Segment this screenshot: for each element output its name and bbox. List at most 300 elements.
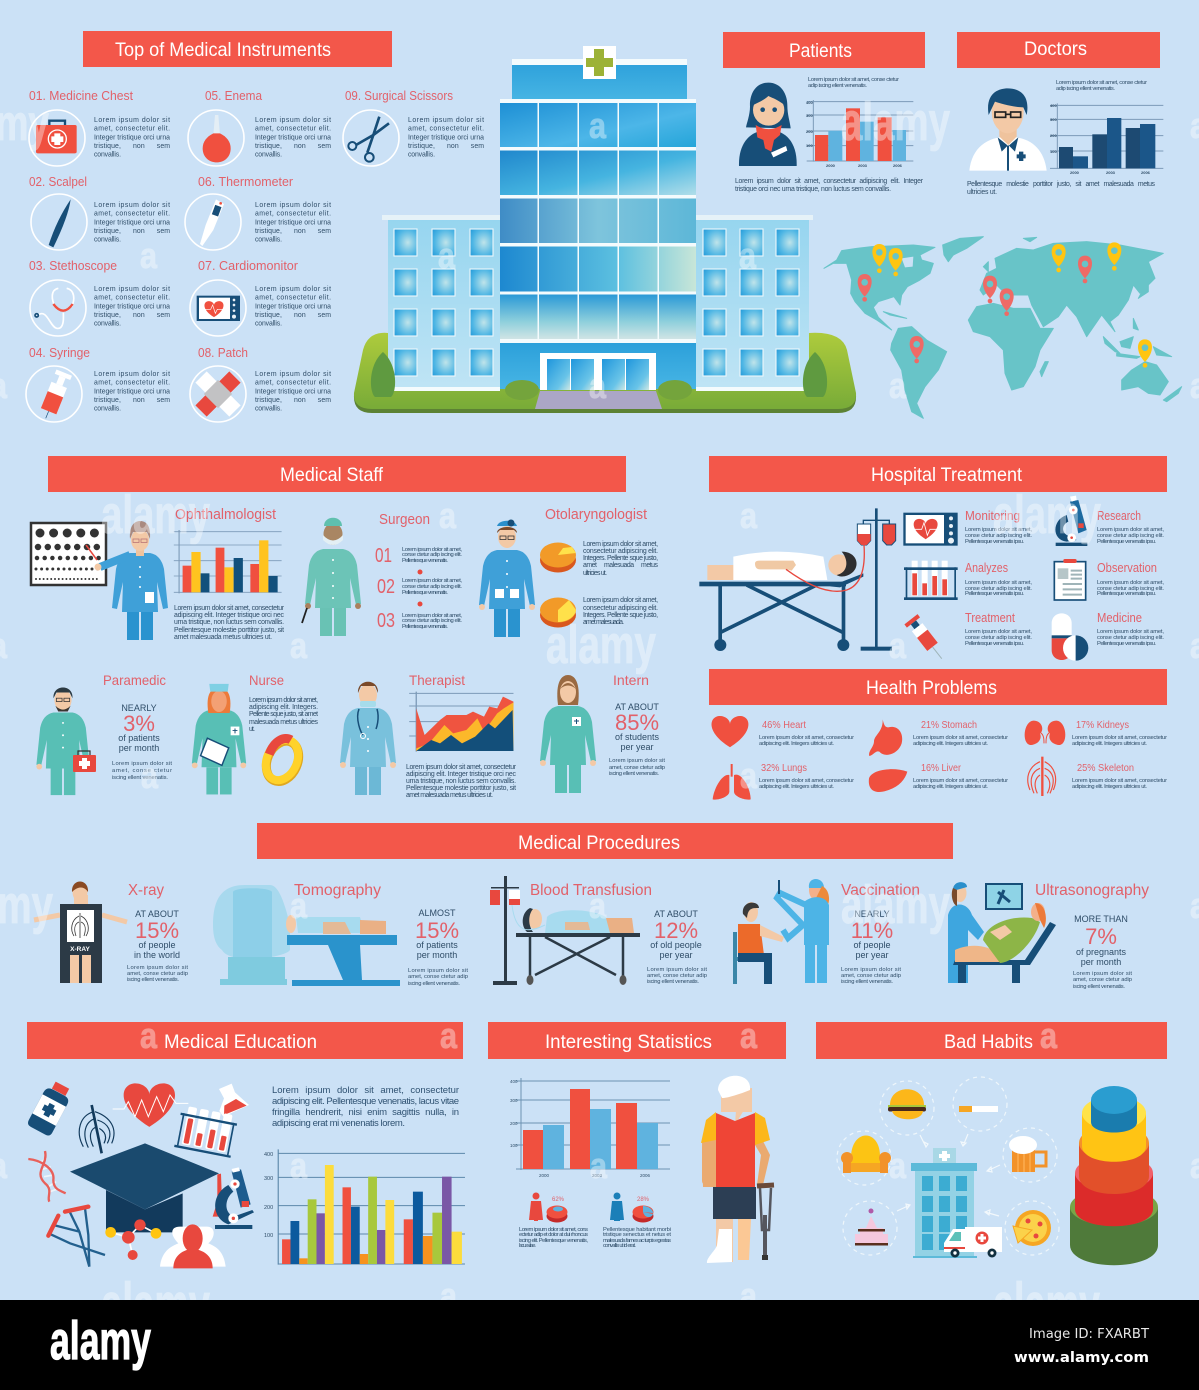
heading: medical staff	[48, 456, 626, 492]
icon: DNA helix	[28, 1151, 66, 1202]
stat: x-ray: in the world	[134, 950, 180, 960]
chart labels: patients: 2000	[826, 163, 836, 168]
watermarks: a	[740, 1015, 758, 1056]
stat: intern	[609, 702, 665, 777]
text block: nurse: malesuada metus ultricies	[249, 719, 319, 726]
chart: ophthalmologist bars	[174, 530, 282, 593]
illustration: tomography	[213, 885, 400, 986]
label: analyzes: Analyzes	[965, 560, 1008, 575]
stat: lungs: Lorem ipsum dolor sit amet, consectetur	[759, 778, 854, 784]
icon: people	[160, 1224, 226, 1268]
stat: blood transfusion: per year	[659, 950, 693, 960]
text block: instrument descriptions: amet, consectetur elit.	[255, 380, 331, 387]
label: monitoring: Monitoring	[965, 508, 1020, 523]
chart labels: doctors: 200	[1050, 133, 1057, 138]
watermarks: a	[889, 1145, 907, 1186]
stat: intern: of students	[615, 732, 660, 742]
text block: otolaryngologist 1: consectetur adipiscing elit.	[583, 548, 658, 555]
watermarks: a	[140, 235, 158, 276]
numbered list: surgeon: 03	[377, 610, 395, 632]
stat: 62%	[529, 1192, 568, 1222]
stat: paramedic: 3%	[123, 711, 155, 736]
text block: patients intro: Lorem ipsum dolor sit amet, conse ctetur	[808, 77, 899, 83]
chart labels: patients: 300	[806, 113, 813, 118]
chart: statistics bars: 2006	[640, 1173, 651, 1178]
chart: stacked cylinders	[1070, 1086, 1158, 1265]
stat: liver: Lorem ipsum dolor sit amet, consectetur	[913, 778, 1008, 784]
footer bar	[0, 1300, 1199, 1390]
text block: ophthalmologist: Lorem ipsum dolor sit amet, consectetur	[174, 605, 285, 612]
stat: 28%: 28%	[637, 1197, 650, 1203]
stat: ultrasonography: amet, conse ctetur adip	[1073, 977, 1132, 983]
stat: 28%	[610, 1192, 654, 1222]
text block: observation: conse ctetur adip iscing elit.	[1097, 586, 1164, 592]
icon: ambulance	[944, 1227, 1002, 1258]
stat: ultrasonography	[1073, 914, 1132, 990]
stat: skeleton: 25% Skeleton	[1077, 762, 1134, 774]
image id: Image ID: FXARBT	[1029, 1327, 1149, 1342]
watermarks: alamy	[993, 485, 1101, 545]
stat: heart: 46% Heart	[762, 719, 806, 731]
text block: instrument descriptions: convallis.	[255, 320, 282, 328]
stat: vaccination: NEARLY	[854, 909, 890, 919]
watermarks: a	[740, 495, 758, 536]
text block: instrument descriptions: Lorem ipsum dolor sit	[94, 117, 170, 124]
label: nurse: Nurse	[249, 672, 284, 688]
chart: statistics bars: 2000	[539, 1173, 550, 1178]
heading: medical staff: Medical Staff	[280, 465, 384, 486]
heading: instruments	[83, 31, 392, 67]
text block: instrument descriptions: convallis.	[94, 152, 121, 158]
text block: otolaryngologist 2	[583, 597, 658, 626]
stat: skeleton	[1072, 762, 1167, 790]
stat: tomography: 15%	[415, 918, 459, 943]
watermarks: a	[740, 1275, 758, 1316]
label: 07 Cardiomonitor: 07. Cardiomonitor	[198, 258, 299, 273]
text block: treatment: conse ctetur adip iscing elit.	[965, 635, 1032, 641]
hospital building	[354, 46, 856, 413]
text block: therapist: Lorem ipsum dolor sit amet, consectetur	[406, 764, 517, 771]
text block: treatment	[965, 629, 1032, 647]
panel: Health Problems	[709, 669, 1167, 800]
text block: instrument descriptions: Integer tristique orci urna	[255, 303, 331, 310]
text block: instrument descriptions: Lorem ipsum dolor sit	[94, 202, 170, 209]
text block: observation	[1097, 580, 1164, 597]
chart: therapist area	[409, 692, 513, 752]
stat: lungs	[759, 762, 854, 790]
text block: doctors intro: Lorem ipsum dolor sit amet, conse ctetur	[1056, 80, 1147, 86]
stat: tomography: of patients	[416, 940, 458, 950]
chart: education bars: 400	[264, 1152, 273, 1158]
chart labels: patients: 400	[806, 100, 813, 105]
figure: x-ray	[34, 882, 127, 983]
text block: instrument descriptions: tristique, non sem	[94, 228, 170, 235]
text block: instrument descriptions: convallis.	[255, 236, 282, 244]
watermarks: alamy	[101, 485, 210, 545]
text block: research: conse ctetur adip iscing elit.	[1097, 533, 1164, 539]
stat: stomach: adipiscing elit. Integers ultricies ut.	[913, 741, 988, 747]
numbered list: surgeon: Lorem ipsum dolor sit amet,	[402, 578, 462, 584]
label: blood transfusion: Blood Transfusion	[530, 882, 652, 899]
text block: instrument descriptions: Lorem ipsum dolor sit	[408, 117, 484, 124]
label: 02 Scalpel: 02. Scalpel	[29, 174, 87, 189]
heading: medical education: Medical Education	[164, 1032, 317, 1053]
figure: ophthalmologist	[94, 521, 168, 640]
icon: thermometer	[200, 199, 224, 246]
text block: instrument descriptions: convallis.	[94, 236, 121, 244]
stat: blood transfusion: Lorem ipsum dolor sit	[647, 967, 707, 973]
watermarks: a	[589, 365, 607, 406]
numbered list: surgeon: 02	[377, 576, 395, 598]
text block: instrument descriptions: Integer tristique orci urna	[255, 219, 331, 226]
text block: instrument descriptions: tristique, non sem	[94, 312, 170, 319]
stat: x-ray: Lorem ipsum dolor sit	[127, 965, 188, 971]
figure: surgeon	[302, 518, 361, 636]
watermarks: a	[1040, 1015, 1058, 1056]
stat: x-ray: 15%	[135, 918, 179, 943]
text block: instrument descriptions: amet, consectetur elit.	[408, 126, 484, 133]
text block: instrument descriptions: convallis.	[408, 152, 435, 158]
text block: patients body	[735, 178, 924, 193]
text block: research	[1097, 527, 1164, 545]
stat: paramedic: iscing ellent venenatis.	[112, 775, 168, 781]
stat: skeleton: adipiscing elit. Integers ultricies ut.	[1072, 784, 1147, 790]
text block: medicine: Pellentesque venenatis ipsu.	[1097, 641, 1156, 647]
text block: 62%	[519, 1227, 588, 1249]
stat: blood transfusion: iscing ellent venenatis.	[647, 979, 699, 985]
icon: doctor	[969, 88, 1047, 171]
watermarks: a	[590, 1145, 608, 1186]
sign: green cross	[583, 46, 616, 79]
text block: patients body: Lorem ipsum dolor sit amet, consectetur adipiscing elit. Integer	[735, 178, 924, 185]
text block: instrument descriptions: amet, consectetur elit.	[255, 211, 331, 218]
text block: otolaryngologist 2: Integers. Pellente sque justo,	[583, 612, 658, 619]
stat: lungs: adipiscing elit. Integers ultricies ut.	[759, 784, 834, 790]
icon: crutches	[48, 1207, 105, 1267]
heading: health problems: Health Problems	[866, 678, 997, 699]
text block: instrument descriptions: tristique, non sem	[255, 228, 331, 235]
text block: analyzes: Lorem ipsum dolor sit amet,	[965, 580, 1032, 586]
heading: patients: Patients	[789, 41, 852, 62]
text block: instrument descriptions: convallis.	[255, 406, 282, 412]
figure: nurse	[192, 684, 246, 794]
chart labels: doctors: 100	[1050, 149, 1057, 154]
stat: paramedic	[112, 703, 172, 781]
numbered list: surgeon: conse ctetur adip iscing elit.	[402, 552, 462, 558]
stat: stomach: 21% Stomach	[921, 719, 977, 731]
chart labels: doctors: 2006	[1141, 170, 1151, 175]
stat: ultrasonography: iscing ellent venenatis.	[1073, 984, 1125, 990]
text block: education: adipiscing erat mi venenatis lorem.	[272, 1118, 405, 1129]
label: intern: Intern	[613, 672, 649, 688]
chart labels: doctors	[1050, 103, 1151, 175]
text block: therapist	[406, 764, 517, 799]
text block: analyzes: Pellentesque venenatis ipsu.	[965, 591, 1024, 597]
world map with pins	[824, 237, 1182, 418]
stat: liver: adipiscing elit. Integers ultricies ut.	[913, 784, 988, 790]
stat: ultrasonography: Lorem ipsum dolor sit	[1073, 971, 1132, 977]
text block: instrument descriptions: convallis.	[94, 406, 121, 412]
text block: ophthalmologist	[174, 605, 285, 641]
icon: enema bulb	[203, 115, 231, 162]
website: www.alamy.com	[1014, 1350, 1149, 1366]
stat: intern: amet, conse ctetur adip	[609, 765, 665, 771]
icon: molecule	[105, 1219, 161, 1260]
icon: small hospital	[911, 1148, 977, 1258]
text block: otolaryngologist 1: ultricies ut.	[583, 570, 607, 577]
icon: surgical scissors	[348, 117, 389, 162]
chart: statistics bars	[510, 1078, 670, 1178]
heading: interesting statistics: Interesting Statistics	[545, 1032, 712, 1053]
text block: instrument descriptions: tristique, non sem	[94, 143, 170, 150]
text block: 28%: tristique senectus et netus et	[603, 1232, 671, 1238]
chart: education bars	[264, 1149, 465, 1265]
chart: education bars: 300	[264, 1176, 273, 1182]
text block: otolaryngologist 1: Lorem ipsum dolor sit amet,	[583, 541, 658, 548]
stat: kidneys	[1072, 719, 1167, 747]
text block: instrument descriptions: Integer tristique orci urna	[255, 134, 331, 141]
icon: medicine chest	[36, 121, 77, 153]
numbered list: surgeon	[375, 545, 462, 632]
text block: instrument descriptions: amet, consectetur elit.	[255, 126, 331, 133]
heading: bad habits	[816, 1022, 1167, 1059]
illustration: ultrasonography	[948, 882, 1056, 983]
stat: blood transfusion: AT ABOUT	[654, 909, 698, 919]
text block: instrument descriptions: amet, consectetur elit.	[94, 295, 170, 302]
icon: clipboard	[1054, 559, 1086, 600]
chart: statistics bars: 400	[510, 1079, 518, 1084]
stat: intern: iscing ellent venenatis.	[609, 771, 659, 777]
text block: monitoring: conse ctetur adip iscing elit.	[965, 533, 1032, 539]
text block: 62%: Lorem ipsum dolor sit amet, cons	[519, 1227, 588, 1233]
panel: Doctors	[957, 32, 1163, 196]
text block: instrument descriptions: Integer tristique orci urna	[94, 303, 170, 310]
text block: doctors body: Pellentesque molestie porttitor justo, sit amet malesuada metus	[967, 181, 1156, 188]
stat: stomach	[913, 719, 1008, 747]
text block: 62%: iscing elit. Pellentesque venenatis,	[519, 1238, 588, 1244]
stat: vaccination: iscing ellent venenatis.	[841, 979, 893, 985]
text block: doctors body: ultricies ut.	[967, 189, 997, 196]
stat: ultrasonography: per month	[1081, 957, 1121, 967]
stat: tomography: amet, conse ctetur adip	[408, 974, 468, 980]
stat: paramedic: amet, conse ctetur	[112, 768, 172, 774]
heading: hospital treatment: Hospital Treatment	[871, 465, 1023, 486]
text block: 62%: ectetur adip et dolor at dui rhoncus	[519, 1232, 588, 1238]
text block: medicine: Lorem ipsum dolor sit amet,	[1097, 629, 1164, 635]
watermarks: a	[140, 1015, 158, 1056]
text block: otolaryngologist 2: consectetur adipiscing elit.	[583, 605, 658, 612]
icon: bottle	[26, 1079, 74, 1137]
text block: therapist: urna tristique, non luctus sem convallis.	[406, 778, 516, 785]
stat: kidneys: 17% Kidneys	[1076, 719, 1129, 731]
heading: health problems	[709, 669, 1167, 705]
watermarks: a	[439, 495, 457, 536]
text block: 28%: malesuada fames ac turpis egestas	[603, 1238, 671, 1244]
stat: x-ray: AT ABOUT	[135, 909, 179, 919]
text block: monitoring: Pellentesque venenatis ipsu.	[965, 539, 1024, 545]
text block: education: adipiscing elit. Pellentesque venenatis, lacus vitae	[272, 1096, 459, 1107]
icon: skeleton	[1028, 757, 1056, 796]
chart: pie 1	[540, 542, 576, 572]
stat: x-ray: of people	[138, 940, 176, 950]
figure: injured man	[701, 1076, 774, 1263]
label: 06 Thermometer: 06. Thermometer	[198, 174, 294, 189]
chart: statistics bars: 100	[510, 1143, 518, 1148]
text block: therapist: Pellentesque molestie porttitor justo, sit	[406, 785, 516, 792]
panel: Hospital Treatment	[699, 456, 1167, 664]
label: medicine: Medicine	[1097, 610, 1142, 625]
panel: Medical Education	[26, 1022, 465, 1268]
text block: otolaryngologist 1: Integers. Pellente sque justo,	[583, 555, 658, 562]
stat: stomach: Lorem ipsum dolor sit amet, consectetur	[913, 735, 1008, 741]
text block: instrument descriptions: amet, consectetur elit.	[94, 211, 170, 218]
icon: heart with pulse	[113, 1083, 188, 1127]
text block: 28%: Pellentesque habitant morbi	[603, 1227, 671, 1233]
icon: stethoscope	[35, 288, 74, 328]
text block: monitoring	[965, 527, 1032, 545]
stat: intern: AT ABOUT	[615, 702, 659, 712]
icon: heart	[712, 716, 748, 747]
label: ultrasonography: Ultrasonography	[1035, 882, 1149, 899]
text block: treatment: Lorem ipsum dolor sit amet,	[965, 629, 1032, 635]
stat: lungs: 32% Lungs	[761, 762, 807, 774]
chart labels: doctors: 400	[1050, 103, 1057, 108]
stat: tomography	[408, 908, 468, 987]
watermarks: a	[141, 755, 159, 796]
text block: instrument descriptions: tristique, non sem	[94, 397, 170, 404]
label: ophthalmologist: Ophthalmologist	[175, 507, 276, 523]
icon: kidneys	[1025, 721, 1065, 745]
text block: therapist: adipiscing elit. Integer tristique orci nec	[406, 771, 517, 778]
watermarks: a	[889, 625, 907, 666]
stat: intern: Lorem ipsum dolor sit	[609, 758, 665, 764]
icon: test tubes	[904, 561, 958, 600]
label: paramedic: Paramedic	[103, 672, 166, 688]
chart: statistics bars: 2003	[592, 1173, 603, 1178]
text block: instrument descriptions: tristique, non sem	[255, 397, 331, 404]
text block: treatment: Pellentesque venenatis ipsu.	[965, 641, 1024, 647]
text block: instrument descriptions: amet, consectetur elit.	[94, 126, 170, 133]
heading: medical procedures	[257, 823, 953, 859]
watermarks: alamy	[993, 1271, 1100, 1338]
label: 04 Syringe: 04. Syringe	[29, 345, 90, 360]
label: 05 Enema: 05. Enema	[205, 88, 263, 103]
stat: paramedic: per month	[119, 743, 159, 753]
stat: intern: per year	[620, 742, 654, 752]
label: 09 Surgical Scissors: 09. Surgical Scissors	[345, 88, 453, 103]
text block: medicine	[1097, 629, 1164, 647]
text block: ophthalmologist: amet malesuada metus ultricies ut.	[174, 634, 272, 641]
text block: nurse: ut.	[249, 726, 255, 733]
stat: kidneys: Lorem ipsum dolor sit amet, consectetur	[1072, 735, 1167, 741]
stat: x-ray: iscing ellent venenatis.	[127, 977, 179, 983]
stat: heart: Lorem ipsum dolor sit amet, consectetur	[759, 735, 854, 741]
text block: education: fringilla hendrerit, nisi enim sagittis nulla, in	[272, 1107, 459, 1118]
numbered list: surgeon: Pellentesque venenatis.	[402, 590, 448, 596]
text block: analyzes: conse ctetur adip iscing elit.	[965, 586, 1032, 592]
text block: instrument descriptions: Integer tristique orci urna	[94, 134, 170, 141]
text block: doctors intro: adip iscing ellent venenatis.	[1056, 86, 1115, 92]
icon: patient woman	[739, 83, 797, 166]
icon: burger	[888, 1089, 926, 1119]
text block: instrument descriptions: Lorem ipsum dolor sit	[94, 371, 170, 378]
stat: vaccination: amet, conse ctetur adip	[841, 973, 901, 979]
numbered list: surgeon: conse ctetur adip iscing elit.	[402, 584, 462, 590]
watermarks: a	[440, 1015, 458, 1056]
chart labels: patients	[806, 100, 903, 168]
label: observation: Observation	[1097, 560, 1157, 575]
chart: doctors bars	[1050, 103, 1163, 169]
chart: education bars: 200	[264, 1205, 273, 1211]
text block: instrument descriptions: Integer tristique orci urna	[94, 388, 170, 395]
watermarks: alamy	[841, 92, 950, 152]
icon: cardiomonitor	[197, 296, 240, 321]
text block: nurse: Pellente sque justo, sit amet	[249, 711, 318, 718]
text block: instrument descriptions: tristique, non sem	[255, 312, 331, 319]
chart: eye test board	[31, 523, 106, 585]
chart labels: doctors: 300	[1050, 117, 1057, 122]
panel: Medical Staff	[31, 456, 665, 799]
text block: nurse: Lorem ipsum dolor sit amet,	[249, 697, 318, 704]
text block: observation: Pellentesque venenatis ipsu.	[1097, 591, 1156, 597]
text block: ophthalmologist: urna tristique, non luctus sem convallis.	[174, 619, 284, 626]
icon: scalpel	[49, 199, 71, 247]
watermarks: alamy	[841, 875, 950, 935]
watermarks: a	[290, 625, 308, 666]
text block: instrument descriptions: amet, consectetur elit.	[255, 295, 331, 302]
chart labels: doctors: 2000	[1070, 170, 1080, 175]
numbered list: surgeon: conse ctetur adip iscing elit.	[402, 618, 462, 624]
text block: research: Lorem ipsum dolor sit amet,	[1097, 527, 1164, 533]
icon: paramedic bag	[73, 751, 96, 772]
watermarks: a	[290, 885, 308, 926]
text block: instrument descriptions: Lorem ipsum dolor sit	[94, 286, 170, 293]
illustration: vaccination	[733, 879, 829, 984]
stat: paramedic: NEARLY	[121, 703, 157, 713]
watermarks: a	[290, 1145, 308, 1186]
numbered list: surgeon: Pellentesque venenatis.	[402, 624, 448, 630]
panel: Bad Habits	[816, 1022, 1167, 1265]
text block: otolaryngologist 2: Lorem ipsum dolor sit amet,	[583, 597, 658, 604]
stat: vaccination: per year	[855, 950, 889, 960]
text block: education	[272, 1085, 459, 1129]
figure: intern	[540, 675, 596, 793]
text block: instrument descriptions: Lorem ipsum dolor sit	[255, 371, 331, 378]
label: therapist: Therapist	[409, 672, 465, 688]
text block: otolaryngologist 1	[583, 541, 659, 577]
stat: intern: 85%	[615, 710, 659, 735]
icon: beer	[1009, 1136, 1046, 1172]
text block: doctors intro	[1056, 80, 1147, 92]
label: 01 Medicine Chest: 01. Medicine Chest	[29, 88, 133, 103]
text block: instrument descriptions: Lorem ipsum dolor sit	[255, 202, 331, 209]
stat: blood transfusion: amet, conse ctetur adip	[647, 973, 707, 979]
stat: ultrasonography: MORE THAN	[1074, 914, 1128, 924]
heading: medical education	[27, 1022, 463, 1059]
text block: instrument descriptions: Integer tristique orci urna	[408, 134, 484, 141]
text block: otolaryngologist 1: amet malesuada metus	[583, 562, 659, 569]
logo: alamy: alamy	[50, 1311, 151, 1371]
label: x-ray: X-ray	[128, 882, 164, 899]
stat: heart: adipiscing elit. Integers ultricies ut.	[759, 741, 834, 747]
label: vaccination: Vaccination	[841, 882, 920, 899]
heading: patients	[723, 32, 925, 68]
text block: ophthalmologist: adipiscing elit. Integer tristique orci nec	[174, 612, 285, 619]
heading: interesting statistics	[488, 1022, 786, 1059]
chart labels: patients: 2003	[858, 163, 868, 168]
panel: Patients	[723, 32, 925, 193]
stat: blood transfusion: of old people	[650, 940, 702, 950]
